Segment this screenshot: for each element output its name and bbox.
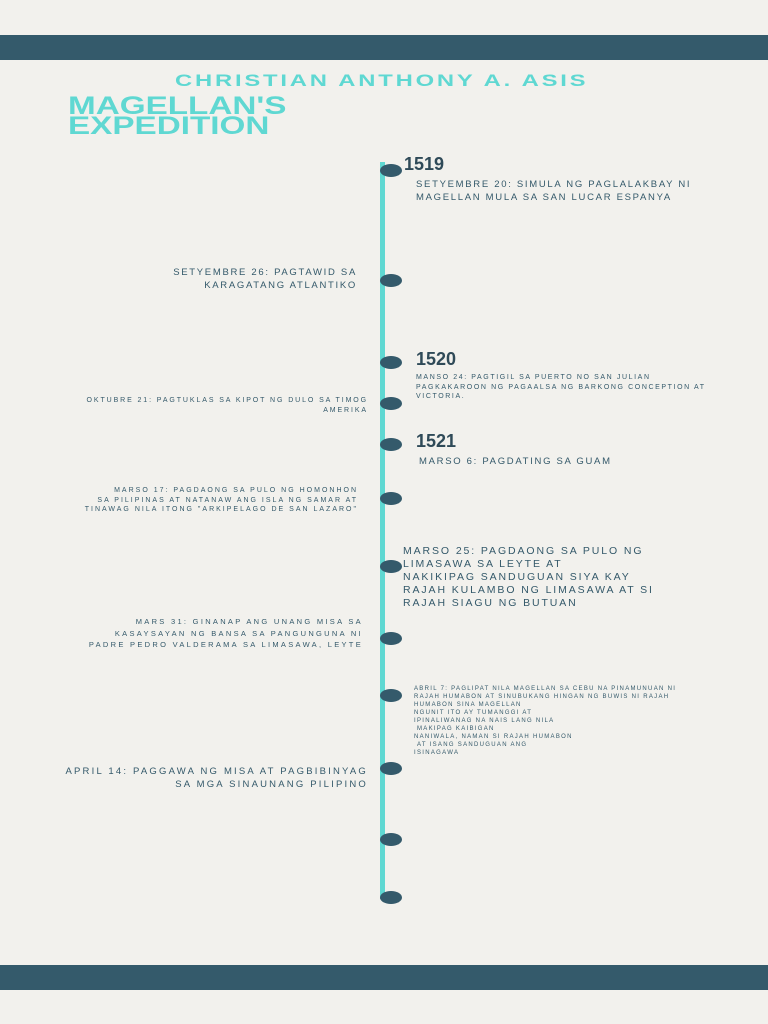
event: Abril 7: AT ISANG SANDUGUAN ANG	[417, 742, 527, 748]
event: April 14: APRIL 14: PAGGAWA NG MISA AT PAGBIBINYAG	[65, 766, 368, 777]
year 1519: 1519	[404, 154, 444, 174]
event: Marso 25: RAJAH SIAGU NG BUTUAN	[403, 597, 578, 609]
event: Abril 7: ISINAGAWA	[414, 750, 459, 756]
event: Abril 7: MAKIPAG KAIBIGAN	[417, 726, 495, 732]
event: Marso 25: RAJAH KULAMBO NG LIMASAWA AT SI	[403, 584, 654, 596]
event: Manso 24	[416, 374, 706, 400]
event: Marso 17: MARSO 17: PAGDAONG SA PULO NG HOMONHON	[114, 487, 358, 494]
event: Oct 21	[86, 397, 368, 414]
event: Abril 7: NANIWALA, NAMAN SI RAJAH HUMABON	[414, 734, 573, 740]
event: Mars 31: PADRE PEDRO VALDERAMA SA LIMASAWA, LEYTE	[89, 640, 363, 649]
event: Sept 20: SETYEMBRE 20: SIMULA NG PAGLALAKBAY NI	[416, 179, 691, 190]
bottom bar	[0, 965, 768, 990]
event: Oct 21: OKTUBRE 21: PAGTUKLAS SA KIPOT NG DULO SA TIMOG	[87, 397, 368, 404]
event: Abril 7: ABRIL 7: PAGLIPAT NILA MAGELLAN SA CEBU NA PINAMUNUAN NI	[414, 686, 676, 692]
event: Marso 17	[84, 487, 358, 513]
event: Oct 21: AMERIKA	[323, 406, 368, 414]
title: EXPEDITION	[68, 112, 269, 140]
event: Mars 31: MARS 31: GINANAP ANG UNANG MISA SA	[136, 617, 363, 626]
event: Manso 24: VICTORIA.	[416, 393, 465, 400]
year 1520: 1520	[416, 349, 456, 369]
title	[68, 92, 286, 140]
timeline line	[380, 162, 385, 899]
event: Marso 25	[403, 545, 654, 609]
author name: CHRISTIAN ANTHONY A. ASIS	[175, 71, 588, 90]
event: Manso 24: PAGKAKAROON NG PAGAALSA NG BARKONG CONCEPTION AT	[416, 384, 706, 390]
title: MAGELLAN'S	[68, 92, 286, 120]
event: Mars 31: KASAYSAYAN NG BANSA SA PANGUNGUNA NI	[115, 628, 363, 638]
event: Marso 6: MARSO 6: PAGDATING SA GUAM	[419, 456, 612, 467]
event: Sept 20: MAGELLAN MULA SA SAN LUCAR ESPANYA	[416, 192, 672, 203]
event: Marso 17: SA PILIPINAS AT NATANAW ANG ISLA NG SAMAR AT	[97, 496, 358, 504]
event: Abril 7	[414, 686, 676, 756]
event: April 14: SA MGA SINAUNANG PILIPINO	[175, 779, 368, 790]
event: Sept 26	[173, 267, 357, 291]
event: Marso 25: NAKIKIPAG SANDUGUAN SIYA KAY	[403, 571, 631, 583]
year 1521: 1521	[416, 431, 456, 451]
event: Marso 25: MARSO 25: PAGDAONG SA PULO NG	[403, 545, 643, 557]
event: Marso 17: TINAWAG NILA ITONG "ARKIPELAGO DE SAN LAZARO"	[85, 506, 358, 513]
event: Abril 7: NGUNIT ITO AY TUMANGGI AT	[414, 710, 532, 716]
event: April 14	[65, 766, 368, 790]
event: Abril 7: HUMABON SINA MAGELLAN	[414, 702, 522, 708]
event: Marso 25: LIMASAWA SA LEYTE AT	[403, 558, 563, 570]
event: Mars 31	[89, 617, 363, 649]
event: Sept 26: SETYEMBRE 26: PAGTAWID SA	[173, 267, 357, 278]
event: Sept 26: KARAGATANG ATLANTIKO	[204, 280, 357, 291]
event: Sept 20	[416, 179, 691, 203]
event: Abril 7: RAJAH HUMABON AT SINUBUKANG HINGAN NG BUWIS NI RAJAH	[414, 694, 669, 700]
event: Abril 7: IPINALIWANAG NA NAIS LANG NILA	[414, 718, 554, 724]
event: Manso 24: MANSO 24: PAGTIGIL SA PUERTO NO SAN JULIAN	[416, 374, 651, 381]
top bar	[0, 35, 768, 60]
